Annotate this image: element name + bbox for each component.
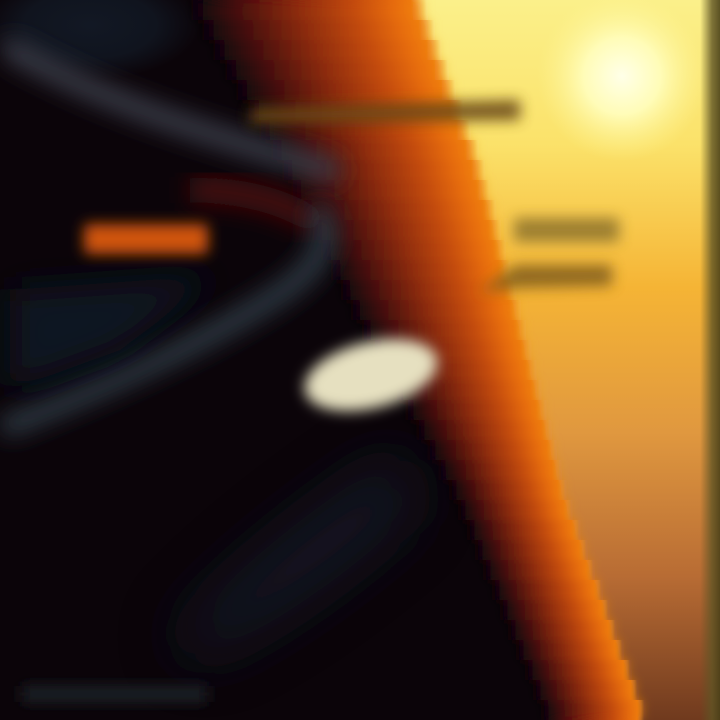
orange label [84, 224, 208, 254]
bottom-left faint label [22, 686, 207, 702]
glowing planet limb [193, 0, 644, 720]
right label, first line [514, 218, 619, 242]
navy panel under the curve [10, 275, 220, 390]
right label, second line [480, 265, 612, 292]
top-left dusk tint [0, 0, 210, 90]
lower curved band [10, 215, 325, 425]
cream ellipse callout [297, 327, 445, 423]
right edge strip [700, 0, 720, 720]
upper curved band [12, 50, 330, 170]
red shadow under band [190, 190, 320, 225]
dark planet body [0, 0, 555, 720]
lower navy haze [170, 450, 420, 660]
dark heading bar across limb [250, 100, 520, 124]
sun glow [537, 0, 707, 161]
